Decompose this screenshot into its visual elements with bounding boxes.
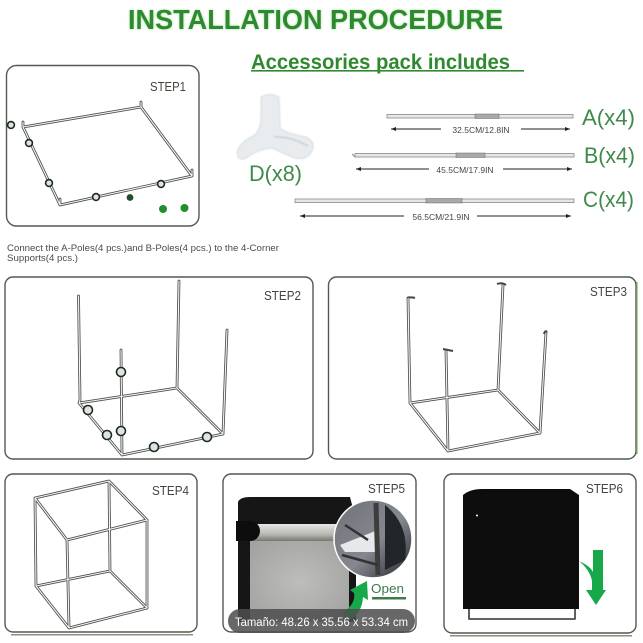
step 2 label: STEP2 bbox=[264, 289, 301, 303]
panel: step 5 bbox=[223, 474, 416, 633]
step 4 cube bbox=[35, 481, 147, 628]
icon: green down arrow bbox=[579, 550, 606, 605]
step 3 frame bbox=[408, 283, 547, 451]
heading: accessories pack: Accessories pack includes bbox=[251, 51, 510, 74]
step 1 label: STEP1 bbox=[150, 80, 186, 94]
rod A: A(x4) bbox=[582, 105, 635, 130]
label D: D(x8) bbox=[249, 161, 302, 186]
panel: step 4 bbox=[5, 474, 197, 636]
green dots bbox=[159, 204, 188, 213]
rod C: C(x4) bbox=[583, 187, 634, 212]
covered tent bbox=[463, 489, 579, 619]
rod C bbox=[295, 187, 634, 222]
step 3 label: STEP3 bbox=[590, 285, 627, 299]
rod B: B(x4) bbox=[584, 143, 635, 168]
rod C: 56.5CM/21.9IN bbox=[412, 212, 470, 222]
open label: Open bbox=[371, 581, 404, 596]
panel: step 3 bbox=[328, 277, 638, 459]
panel: step 2 bbox=[5, 277, 313, 459]
step 1 instructions: Supports(4 pcs.) bbox=[7, 253, 78, 263]
rod B: 45.5CM/17.9IN bbox=[436, 165, 494, 175]
rod B bbox=[352, 143, 635, 175]
step 5 label: STEP5 bbox=[368, 482, 405, 496]
title: INSTALLATION PROCEDURE bbox=[128, 4, 503, 35]
rod A bbox=[387, 105, 635, 135]
icon: green open arrow bbox=[343, 581, 368, 622]
step 1 frame bbox=[8, 102, 192, 205]
size caption: Tamaño: 48.26 x 35.56 x 53.34 cm bbox=[235, 617, 408, 629]
step 4 label: STEP4 bbox=[152, 484, 189, 498]
step 6 label: STEP6 bbox=[586, 482, 623, 496]
title: INSTALLATION PROCEDURE bbox=[128, 4, 503, 35]
panel: step 1 bbox=[6, 66, 199, 226]
step 2 frame bbox=[78, 281, 227, 455]
size caption bbox=[228, 609, 415, 633]
rod A: 32.5CM/12.8IN bbox=[452, 125, 510, 135]
step 1 instructions: Connect the A-Poles(4 pcs.)and B-Poles(4 pcs.) to the 4-Corner bbox=[7, 243, 279, 253]
tent with open door bbox=[236, 497, 356, 622]
icon: corner connector D bbox=[237, 94, 313, 159]
panel: step 6 bbox=[444, 474, 636, 636]
detail circle bbox=[334, 500, 412, 578]
step 1 instructions bbox=[7, 243, 279, 263]
